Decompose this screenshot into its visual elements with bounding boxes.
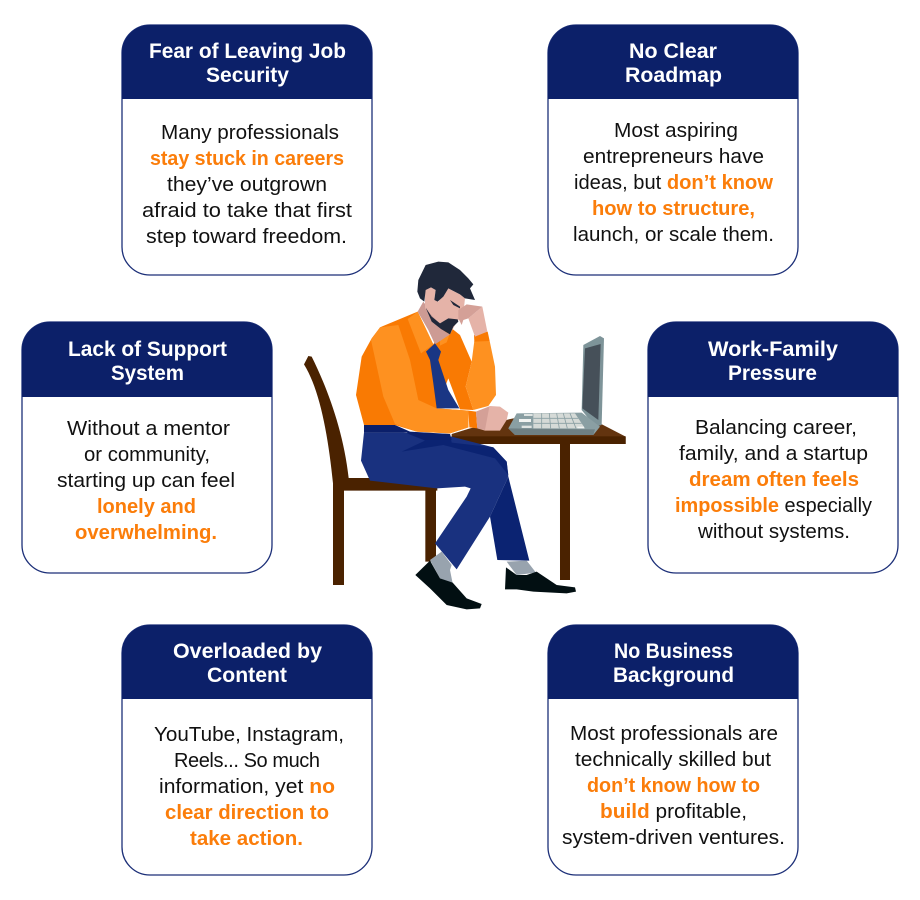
body text: support (57, 418, 235, 544)
shirt (356, 312, 496, 433)
body text: roadmap: ideas, but don’t know (574, 172, 773, 194)
back leg (490, 477, 529, 561)
body text: support: Without a mentor (67, 418, 230, 440)
lower hand on table (476, 406, 508, 431)
necktie (426, 343, 459, 408)
heading: Fear of Leaving Job Security (149, 40, 346, 87)
body text: job security: Many professionals (161, 122, 339, 144)
body text: roadmap: how to structure, (592, 198, 755, 220)
panel: No Clear Roadmap (548, 25, 798, 275)
panel: Work-Family Pressure (648, 322, 898, 573)
chair (304, 356, 437, 585)
front sock and shoe (415, 552, 482, 609)
body text: business: technically skilled but (575, 749, 771, 771)
heading: Overloaded by Content: Overloaded by (173, 640, 322, 663)
heading: Work-Family Pressure (708, 338, 838, 385)
heading: Work-Family Pressure: Pressure (728, 362, 817, 385)
body text: roadmap (573, 120, 774, 246)
panel header: Fear of Leaving Job Security (122, 25, 372, 99)
body text: roadmap: entrepreneurs have (583, 146, 764, 168)
body text: business: system-driven ventures. (562, 827, 785, 849)
heading: Lack of Support System: System (111, 362, 184, 385)
body text: job security: stay stuck in careers (150, 148, 344, 170)
panel header: No Business Background (548, 625, 798, 699)
heading: Fear of Leaving Job Security: Fear of Leaving Job (149, 40, 346, 63)
panel header: No Clear Roadmap (548, 25, 798, 99)
body text: roadmap: launch, or scale them. (573, 224, 774, 246)
heading: Overloaded by Content: Content (207, 664, 287, 687)
beard (426, 308, 458, 334)
body text: business (562, 723, 785, 849)
back sock and shoe (505, 561, 576, 593)
body text: pressure: Balancing career, (695, 417, 857, 439)
body text: support: or community, (84, 444, 210, 466)
body text: content: information, yet no (159, 776, 335, 798)
heading: No Clear Roadmap: Roadmap (625, 64, 722, 87)
body text: job security (142, 122, 352, 248)
heading: Fear of Leaving Job Security: Security (206, 64, 289, 87)
closed eye (450, 300, 460, 308)
panel header: Work-Family Pressure (648, 322, 898, 397)
heading: No Clear Roadmap: No Clear (629, 40, 717, 63)
body text: content: YouTube, Instagram, (154, 724, 344, 746)
belt (364, 425, 452, 440)
body text: support: starting up can feel (57, 470, 235, 492)
heading: Lack of Support System (68, 338, 227, 385)
trousers (361, 433, 508, 569)
body text: job security: step toward freedom. (146, 226, 347, 248)
heading: No Business Background: Background (613, 664, 734, 687)
hand on forehead (458, 304, 487, 337)
body text: content: Reels... So much (174, 750, 320, 772)
body text: pressure: family, and a startup (679, 443, 868, 465)
heading: No Business Background (613, 640, 734, 687)
body text: pressure: dream often feels (689, 469, 859, 491)
heading: Lack of Support System: Lack of Support (68, 338, 227, 361)
body text: business: Most professionals are (570, 723, 778, 745)
heading: No Clear Roadmap (625, 40, 722, 87)
panel: Overloaded by Content (122, 625, 372, 875)
body text: pressure: impossible especially (675, 495, 872, 517)
panel header: Lack of Support System (22, 322, 272, 397)
laptop (508, 336, 604, 435)
illustration: stressed man at laptop (304, 262, 626, 609)
body text: pressure (675, 417, 872, 543)
body text: content: take action. (190, 828, 303, 850)
panel header: Overloaded by Content (122, 625, 372, 699)
heading: No Business Background: No Business (614, 640, 733, 663)
body text: support: overwhelming. (75, 522, 217, 544)
neck (418, 302, 450, 344)
body text: business: build profitable, (600, 801, 747, 823)
hair (417, 262, 475, 302)
panel: Fear of Leaving Job Security (122, 25, 372, 275)
body text: business: don’t know how to (587, 775, 760, 797)
body text: roadmap: Most aspiring (614, 120, 738, 142)
body text: pressure: without systems. (697, 521, 850, 543)
body text: support: lonely and (97, 496, 196, 518)
body text: content (154, 724, 344, 850)
table (452, 418, 626, 580)
body text: job security: afraid to take that first (142, 200, 352, 222)
heading: Overloaded by Content (173, 640, 322, 687)
heading: Work-Family Pressure: Work-Family (708, 338, 838, 361)
panel: Lack of Support System (22, 322, 272, 573)
body text: job security: they’ve outgrown (167, 174, 327, 196)
body text: content: clear direction to (165, 802, 329, 824)
face (425, 287, 465, 334)
panel: No Business Background (548, 625, 798, 875)
